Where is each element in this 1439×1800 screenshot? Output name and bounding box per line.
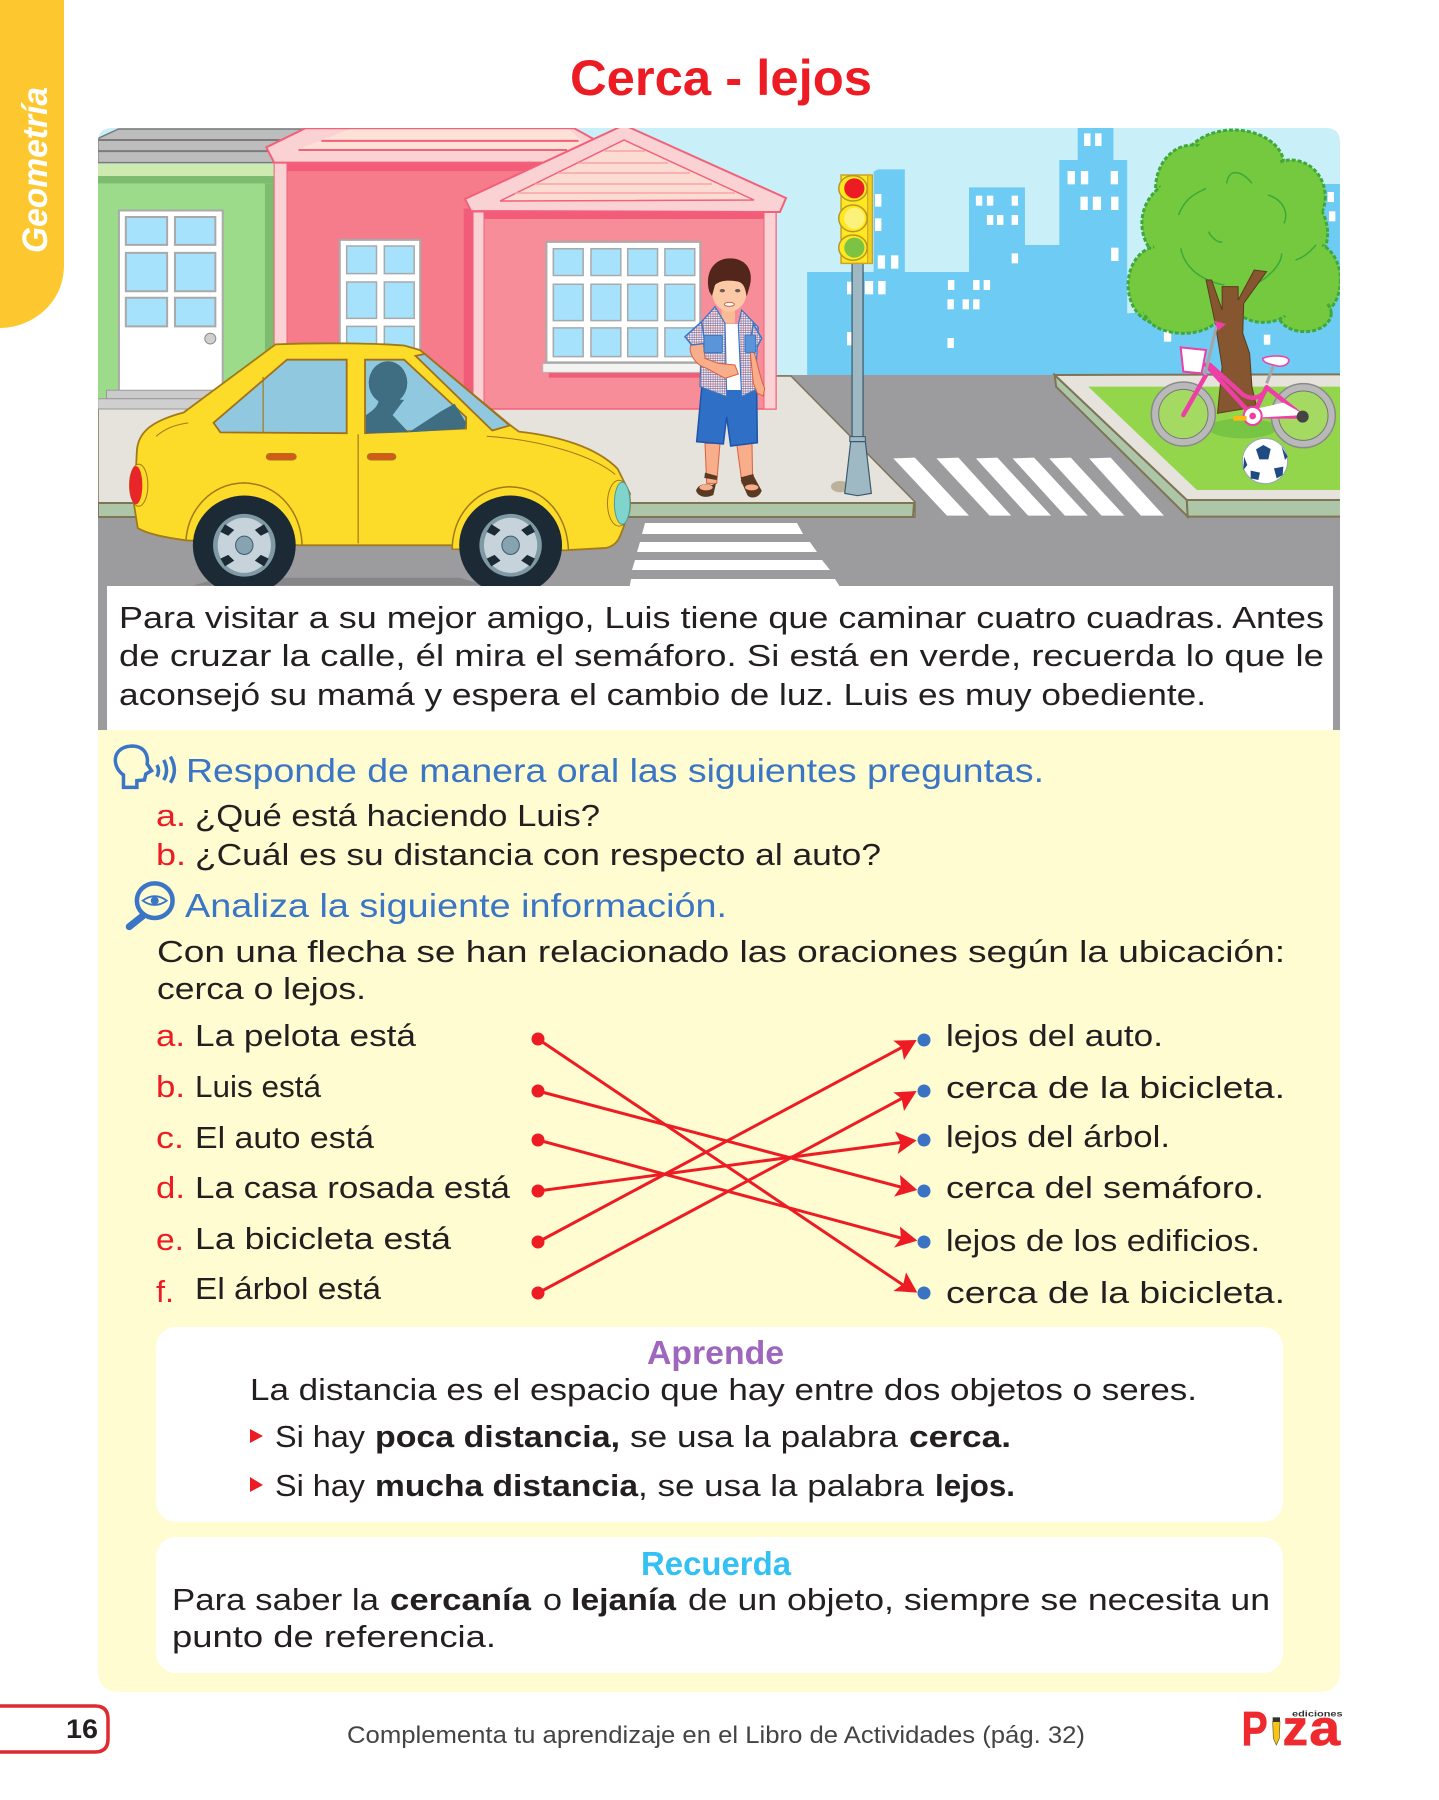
- matching list: left sentences: b.: [156, 1069, 185, 1104]
- story text box: aconsejó su mamá y espera el cambio de luz. Luis es muy obediente.: [119, 677, 1206, 712]
- bullet 1: poca distancia,: [375, 1419, 620, 1454]
- front crosswalk: [629, 523, 842, 590]
- matching list: left sentences: f.: [156, 1274, 174, 1309]
- panel: Recuerda: Recuerda: [641, 1545, 792, 1582]
- city buildings: [807, 128, 1340, 375]
- green house and pink houses left part: [98, 128, 623, 409]
- matching list: right phrases: lejos del árbol.: [946, 1119, 1170, 1154]
- matching list: left sentences: La casa rosada está: [195, 1170, 511, 1205]
- rear pink house: [265, 128, 594, 392]
- traffic light: [831, 175, 872, 496]
- questions a and b: a.: [156, 798, 186, 833]
- panel: Recuerda: cercanía: [390, 1582, 532, 1617]
- rear wheel: [186, 483, 302, 595]
- instructions: cerca o lejos.: [157, 971, 366, 1006]
- sidewalk and curb: [98, 376, 915, 517]
- window: [340, 240, 420, 355]
- matching list: left sentences: La bicicleta está: [195, 1221, 452, 1256]
- matching list: left sentences: e.: [156, 1222, 184, 1257]
- panel: Aprende: [156, 1327, 1283, 1522]
- tail light and headlight: [129, 464, 148, 506]
- bullet 2: Si hay: [275, 1468, 366, 1503]
- tree: [1128, 130, 1340, 413]
- questions a and b: b.: [156, 837, 186, 872]
- matching list: left sentences: d.: [156, 1170, 185, 1205]
- panel: Aprende: La distancia es el espacio que hay entre dos objetos o seres.: [250, 1372, 1197, 1407]
- matching list: left sentences: a.: [156, 1018, 185, 1053]
- boy: Luis: [685, 258, 765, 498]
- matching list: left sentences: [156, 1018, 511, 1309]
- story text box: [107, 586, 1333, 730]
- yellow car: [129, 343, 630, 595]
- panel: Recuerda: punto de referencia.: [172, 1619, 496, 1654]
- road: [98, 375, 1340, 730]
- bullet 1: Si hay: [275, 1419, 366, 1454]
- footer note: Complementa tu aprendizaje en el Libro de Actividades (pág. 32): [347, 1722, 1085, 1749]
- publisher logo: a: [1309, 1700, 1341, 1756]
- questions a and b: ¿Qué está haciendo Luis?: [195, 798, 600, 833]
- car windows: [214, 354, 510, 433]
- story text box: de cruzar la calle, él mira el semáforo. Si está en verde, recuerda lo que le: [119, 638, 1324, 673]
- matching list: left sentences: La pelota está: [195, 1018, 417, 1053]
- questions a and b: ¿Cuál es su distancia con respecto al auto?: [195, 837, 881, 872]
- panel: Recuerda: [156, 1537, 1283, 1673]
- bullet 1: se usa la palabra: [630, 1419, 899, 1454]
- bullet 2: mucha distancia: [375, 1468, 639, 1503]
- front pink house: [465, 125, 786, 409]
- bullet 2: , se usa la palabra: [638, 1468, 925, 1503]
- bullet 1: cerca.: [909, 1419, 1011, 1454]
- panel: Recuerda: o: [543, 1582, 562, 1617]
- publisher logo: ediciones: [1292, 1710, 1343, 1719]
- publisher logo: P: [1242, 1702, 1268, 1756]
- page number tab: [0, 1706, 108, 1752]
- green house: [98, 129, 312, 409]
- matching list: right phrases: lejos del auto.: [946, 1018, 1163, 1053]
- icon: magnifier with eye: [129, 883, 173, 927]
- bicycle and ball: [1151, 321, 1335, 484]
- heading: analyze: Analiza la siguiente información.: [185, 887, 727, 924]
- matching list: right phrases: lejos de los edificios.: [946, 1223, 1260, 1258]
- soccer ball: [1242, 438, 1288, 484]
- matching list: left sentences: El auto está: [195, 1120, 375, 1155]
- page number tab: 16: [66, 1714, 98, 1744]
- publisher logo: z: [1283, 1700, 1308, 1756]
- front wheel: [452, 487, 568, 595]
- matching list: right phrases: [946, 1018, 1285, 1310]
- matching list: right phrases: cerca del semáforo.: [946, 1170, 1264, 1205]
- title: Cerca - lejos: [570, 50, 872, 106]
- matching list: right phrases: cerca de la bicicleta.: [946, 1275, 1285, 1310]
- panel: Recuerda: Para saber la: [172, 1582, 380, 1617]
- matching list: left sentences: Luis está: [195, 1069, 322, 1104]
- instructions: [157, 934, 1285, 1006]
- door handles: [266, 453, 296, 460]
- panel: Recuerda: lejanía: [571, 1582, 677, 1617]
- bullet 2: [250, 1468, 1015, 1503]
- side tab: Geometría: [0, 0, 64, 328]
- side tab: Geometría: Geometría: [16, 87, 55, 253]
- story text box: Para visitar a su mejor amigo, Luis tiene que caminar cuatro cuadras. Antes: [119, 600, 1324, 635]
- instructions: Con una flecha se han relacionado las oraciones según la ubicación:: [157, 934, 1285, 969]
- panel: Recuerda: de un objeto, siempre se necesita un: [688, 1582, 1270, 1617]
- bullet 1: [250, 1419, 1011, 1454]
- window with sill: [543, 242, 706, 378]
- matching list: left sentences: El árbol está: [195, 1271, 382, 1306]
- driver silhouette: [366, 361, 466, 433]
- bullet 2: lejos.: [935, 1468, 1015, 1503]
- panel: yellow activity background: [98, 730, 1340, 1692]
- icon: speaking head: [115, 746, 174, 787]
- questions a and b: [156, 798, 881, 872]
- publisher logo: [1242, 1700, 1343, 1756]
- matching list: right phrases: cerca de la bicicleta.: [946, 1070, 1285, 1105]
- matching list: left sentences: c.: [156, 1120, 184, 1155]
- illustration: street scene: [98, 125, 1344, 730]
- heading: oral questions: Responde de manera oral las siguientes preguntas.: [186, 752, 1044, 789]
- matching arrows: [532, 1032, 930, 1300]
- right side: crosswalk, island, tree: [893, 130, 1344, 517]
- door: [119, 210, 223, 394]
- panel: Aprende: Aprende: [647, 1334, 784, 1371]
